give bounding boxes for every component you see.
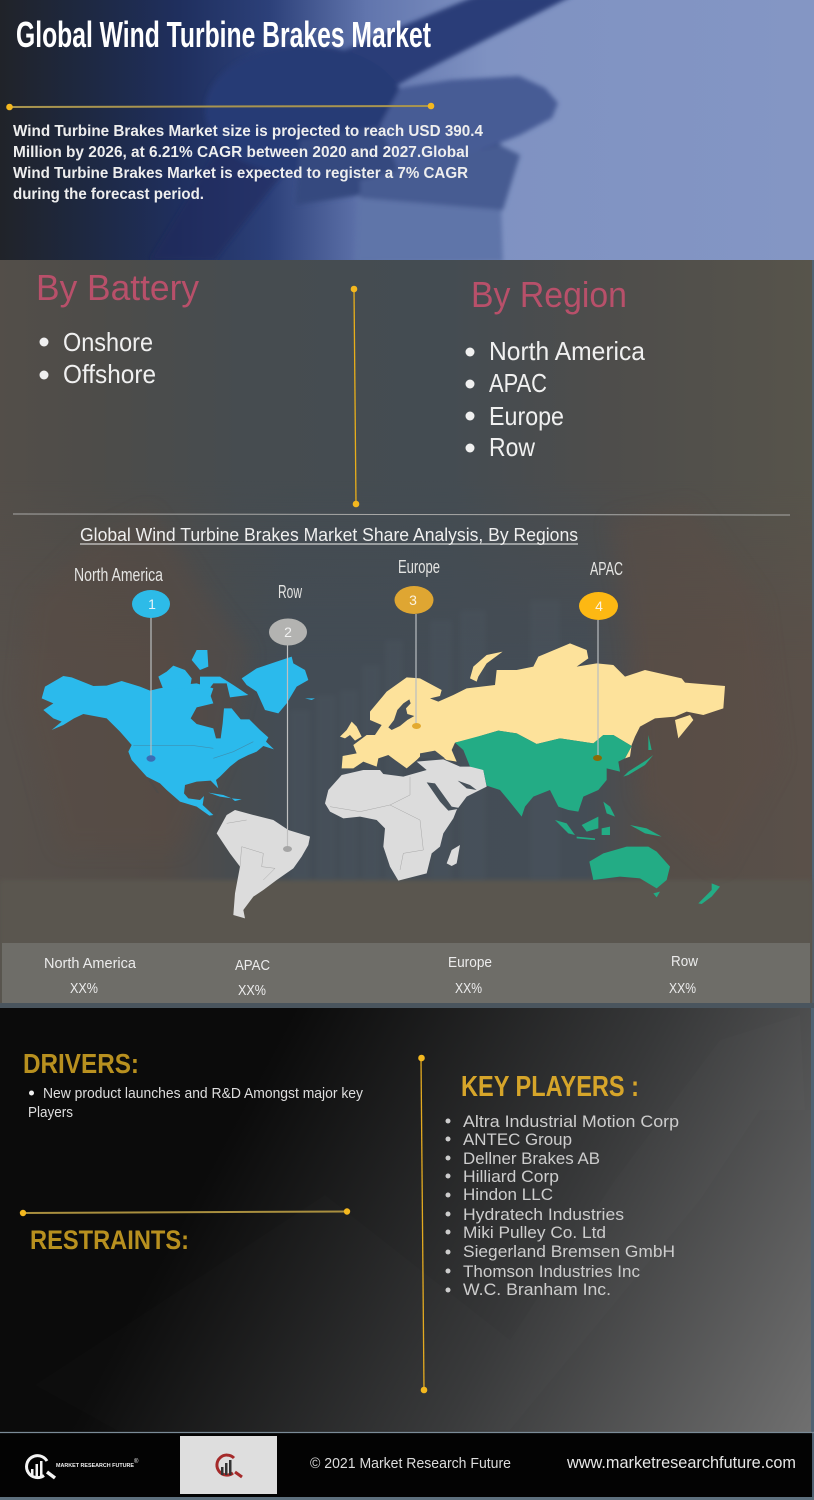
faint bar chart <box>290 600 560 880</box>
player list: Altra Industrial Motion Corp <box>463 1113 679 1131</box>
pin 1: north america <box>74 565 170 762</box>
header panel <box>0 0 814 262</box>
restraints heading: RESTRAINTS: <box>30 1225 189 1255</box>
share: apac: XX% <box>238 983 266 999</box>
driver text <box>28 1085 363 1121</box>
heading: DRIVERS: <box>23 1048 139 1079</box>
heading: KEY PLAYERS : <box>461 1071 639 1103</box>
grey logo box <box>180 1436 277 1494</box>
footer <box>0 1432 814 1500</box>
map: asia pacific <box>455 731 720 904</box>
world map <box>42 643 725 918</box>
share legend band <box>0 943 814 1008</box>
label: North America <box>74 565 164 585</box>
player list: ANTEC Group <box>463 1131 572 1149</box>
white logo: MARKET RESEARCH FUTURE <box>56 1463 134 1469</box>
player list: Hilliard Corp <box>463 1168 559 1186</box>
label: APAC <box>590 559 623 579</box>
region list: APAC <box>489 368 547 398</box>
map: europe and russia <box>340 643 725 768</box>
player list: W.C. Branham Inc. <box>463 1281 611 1299</box>
header gold divider <box>6 103 434 110</box>
share: europe: XX% <box>455 981 482 997</box>
share: row <box>669 954 698 997</box>
label: Row <box>278 582 303 602</box>
battery list: Offshore <box>63 359 156 389</box>
share: apac <box>235 958 270 999</box>
copyright: © 2021 Market Research Future <box>310 1455 511 1472</box>
pin 4: apac: 4 <box>595 598 603 614</box>
player list: Miki Pulley Co. Ltd <box>463 1224 606 1242</box>
intro paragraph: Wind Turbine Brakes Market size is projected to reach USD 390.4 <box>13 123 483 140</box>
pin 4: apac <box>579 559 623 761</box>
panel: by region <box>466 274 645 462</box>
title: Global Wind Turbine Brakes Market <box>16 14 431 55</box>
pin 2: row <box>269 582 307 852</box>
intro paragraph: during the forecast period. <box>13 186 204 203</box>
player list: Dellner Brakes AB <box>463 1150 600 1168</box>
player list: Hindon LLC <box>463 1186 553 1204</box>
key players <box>446 1071 679 1299</box>
region list: Row <box>489 432 535 462</box>
player list: Siegerland Bremsen GmbH <box>463 1243 675 1261</box>
white logo <box>27 1456 139 1478</box>
player list <box>446 1113 679 1299</box>
battery list: Onshore <box>63 327 153 357</box>
share: europe <box>448 955 492 997</box>
player list: Hydratech Industries <box>463 1206 624 1224</box>
segment and map background <box>0 260 812 1005</box>
white logo: ® <box>134 1458 139 1465</box>
pin 1: north america: 1 <box>148 596 156 612</box>
lower dark panel <box>0 1008 811 1432</box>
share: north america <box>44 956 137 997</box>
player list: Thomson Industries Inc <box>463 1263 640 1281</box>
driver text: New product launches and R&D Amongst major key <box>43 1085 363 1102</box>
drivers <box>23 1048 363 1121</box>
heading: by region: By Region <box>471 274 627 315</box>
map heading: Global Wind Turbine Brakes Market Share Analysis, By Regions <box>80 524 578 545</box>
label: Europe <box>398 557 440 577</box>
vertical gold divider <box>351 286 359 507</box>
pin 2: row: 2 <box>284 624 292 640</box>
intro paragraph <box>13 123 483 203</box>
driver text: Players <box>28 1104 73 1121</box>
pin 3: europe: 3 <box>409 592 417 608</box>
share: row: Row <box>671 954 698 970</box>
intro paragraph: Million by 2026, at 6.21% CAGR between 2020 and 2027.Global <box>13 144 469 161</box>
share: north america: North America <box>44 956 137 972</box>
battery list <box>40 327 156 389</box>
share: north america: XX% <box>70 981 98 997</box>
region list: Europe <box>489 401 564 431</box>
map: north america <box>42 650 315 816</box>
website: www.marketresearchfuture.com <box>566 1453 796 1472</box>
intro paragraph: Wind Turbine Brakes Market is expected to register a 7% CAGR <box>13 165 468 182</box>
region list <box>466 336 645 462</box>
heading: by battery: By Battery <box>36 267 199 308</box>
pin 3: europe <box>394 557 440 729</box>
region list: North America <box>489 336 645 366</box>
lower vertical gold divider <box>418 1055 427 1393</box>
panel: by battery <box>36 267 199 389</box>
map: south america <box>217 810 310 918</box>
share: europe: Europe <box>448 955 492 971</box>
share: row: XX% <box>669 981 696 997</box>
map: africa and middle east <box>325 759 487 881</box>
share: apac: APAC <box>235 958 270 974</box>
blurred hands <box>20 505 780 870</box>
turbine photo <box>150 0 574 262</box>
horizontal gold divider <box>20 1208 350 1216</box>
